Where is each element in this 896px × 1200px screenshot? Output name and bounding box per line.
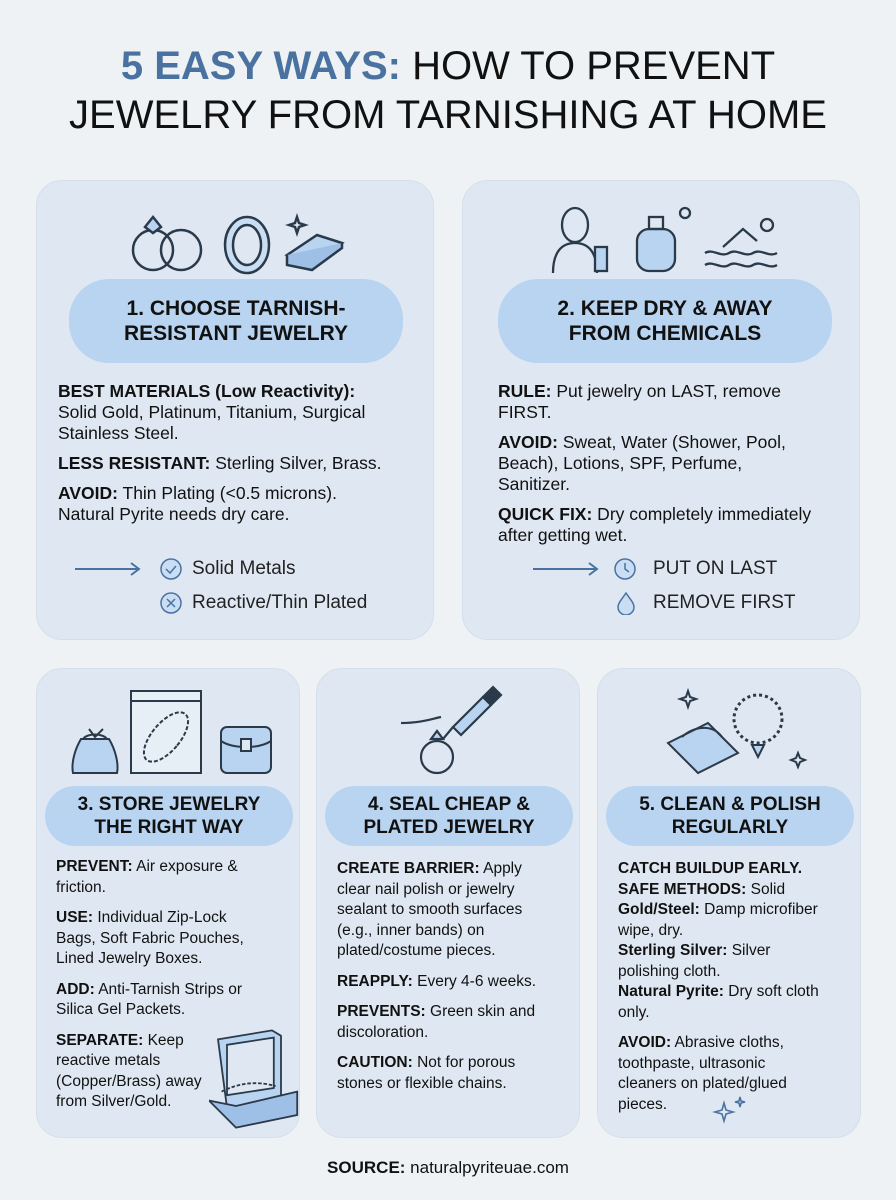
text block (337, 860, 536, 1092)
text block: CAUTION: Not for porous stones or flexible chains. (337, 1054, 515, 1092)
text block: Sterling Silver: Silver polishing cloth. (618, 942, 770, 980)
heading pill: 2. KEEP DRY & AWAY (557, 297, 773, 320)
heading pill: THE RIGHT WAY (94, 817, 244, 838)
title: 5 EASY WAYS: HOW TO PREVENT (121, 44, 775, 88)
heading pill (498, 279, 832, 363)
text block: REAPPLY: Every 4-6 weeks. (337, 972, 536, 990)
heading pill (69, 279, 403, 363)
icon: rings and bar (132, 213, 345, 274)
text block: SAFE METHODS: Solid Gold/Steel: Damp microfiber wipe, dry. (618, 880, 818, 938)
text block: PREVENTS: Green skin and discoloration. (337, 1003, 535, 1040)
text block: LESS RESISTANT: Sterling Silver, Brass. (58, 453, 382, 473)
legend: REMOVE FIRST (653, 592, 796, 613)
text block: BEST MATERIALS (Low Reactivity): Solid Gold, Platinum, Titanium, Surgical Stainless Steel. (58, 381, 365, 443)
icon: pouch, bag, box (71, 690, 272, 774)
text block: USE: Individual Zip-Lock Bags, Soft Fabric Pouches, Lined Jewelry Boxes. (56, 909, 244, 967)
heading pill: RESISTANT JEWELRY (124, 322, 348, 345)
heading pill: 3. STORE JEWELRY (78, 794, 260, 815)
heading pill (606, 786, 854, 846)
text block: Natural Pyrite: Dry soft cloth only. (618, 983, 819, 1020)
legend: Reactive/Thin Plated (192, 592, 367, 613)
text block: RULE: Put jewelry on LAST, remove FIRST. (498, 381, 781, 422)
icon: cloth and necklace (666, 688, 808, 774)
text block: ADD: Anti-Tarnish Strips or Silica Gel Packets. (56, 980, 242, 1018)
heading pill (325, 786, 573, 846)
title: JEWELRY FROM TARNISHING AT HOME (69, 93, 827, 137)
text block: AVOID: Sweat, Water (Shower, Pool, Beach), Lotions, SPF, Perfume, Sanitizer. (498, 432, 786, 494)
heading pill: 5. CLEAN & POLISH (639, 794, 821, 815)
text block (498, 381, 812, 545)
text block: AVOID: Thin Plating (<0.5 microns). Natural Pyrite needs dry care. (58, 483, 337, 524)
legend: PUT ON LAST (653, 558, 777, 579)
heading pill (45, 786, 293, 846)
heading pill: 1. CHOOSE TARNISH- (127, 297, 345, 320)
heading pill: PLATED JEWELRY (363, 817, 534, 838)
text block (618, 860, 819, 1112)
heading pill: 4. SEAL CHEAP & (368, 794, 530, 815)
text block: PREVENT: Air exposure & friction. (56, 858, 238, 896)
text block: CREATE BARRIER: Apply clear nail polish or jewelry sealant to smooth surfaces (e.g., inner bands) on plated/costume pieces. (337, 860, 522, 959)
text block: QUICK FIX: Dry completely immediately after getting wet. (498, 504, 811, 545)
text block: SEPARATE: Keep reactive metals (Copper/Brass) away from Silver/Gold. (56, 1032, 202, 1110)
panel: clean (597, 668, 861, 1138)
icon: jewelry box (209, 1030, 298, 1129)
legend: Solid Metals (192, 558, 296, 579)
source: SOURCE: naturalpyriteuae.com (327, 1158, 569, 1177)
panel: keep dry (462, 180, 860, 640)
text block: CATCH BUILDUP EARLY. (618, 860, 802, 877)
legend (75, 558, 367, 614)
panel: choose tarnish-resistant (36, 180, 434, 640)
icon: ring and nail polish (401, 686, 502, 774)
panel: store (36, 668, 300, 1138)
heading pill: FROM CHEMICALS (569, 322, 761, 345)
heading pill: REGULARLY (672, 817, 788, 838)
legend (533, 558, 796, 615)
title (69, 44, 827, 137)
text block: AVOID: Abrasive cloths, toothpaste, ultrasonic cleaners on plated/glued pieces. (618, 1034, 787, 1112)
text block (56, 858, 244, 1110)
icon: sparkle (712, 1096, 746, 1124)
icon: person, perfume, swimmer (552, 206, 778, 273)
text block (58, 381, 382, 524)
panel: seal (316, 668, 580, 1138)
